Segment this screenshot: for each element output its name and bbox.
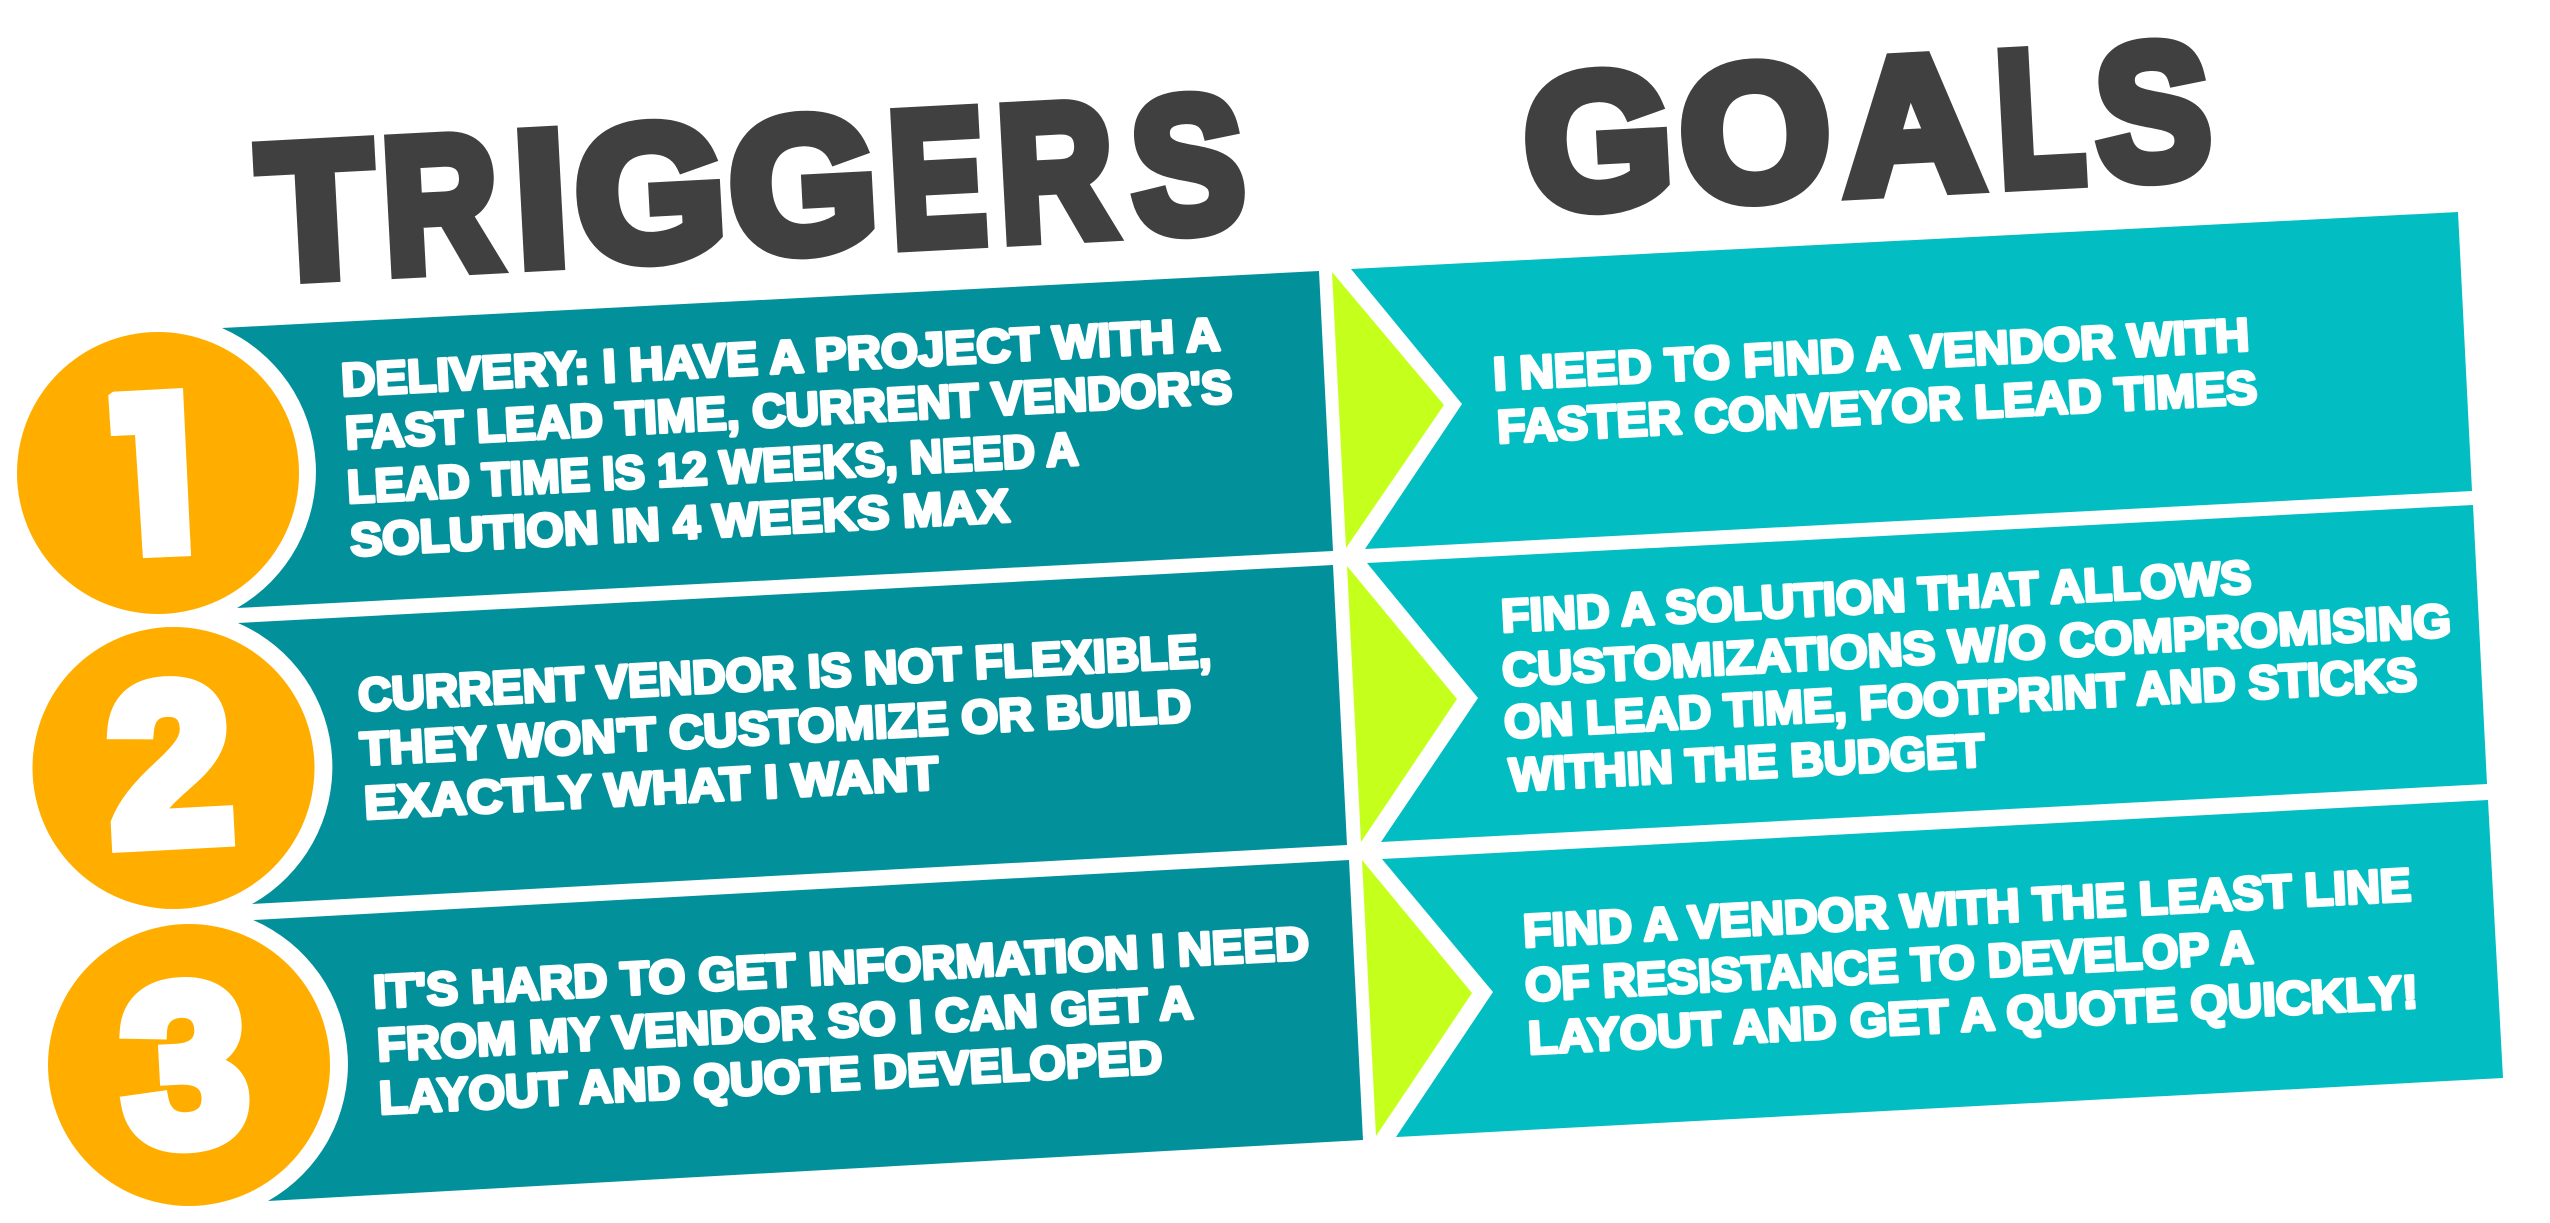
text: goal 2: WITHIN THE BUDGET: [1508, 724, 1986, 801]
title: goals: S: [2090, 3, 2215, 221]
text: goal 3: FIND A VENDOR WITH THE LEAST LINE: [1522, 859, 2412, 957]
icon: number badge 3: 3: [115, 935, 254, 1194]
title: triggers: R: [378, 96, 503, 313]
title: triggers: G: [724, 76, 883, 295]
title: triggers: E: [884, 70, 990, 287]
title: goals: O: [1675, 23, 1835, 243]
text: goal 1: [1492, 308, 2258, 453]
icon: number badge 2: [32, 627, 314, 909]
text: trigger 2: EXACTLY WHAT I WANT: [363, 747, 940, 829]
panel: goal 1: [1351, 212, 2472, 549]
title: triggers: G: [570, 84, 731, 303]
title: goals: L: [1991, 10, 2089, 226]
text: trigger 1: FAST LEAD TIME, CURRENT VENDOR'S: [344, 361, 1233, 459]
text: trigger 2: [357, 624, 1212, 829]
text: goal 2: [1500, 551, 2452, 801]
text: trigger 1: LEAD TIME IS 12 WEEKS, NEED A: [346, 423, 1080, 513]
text: goal 3: LAYOUT AND GET A QUOTE QUICKLY!: [1527, 965, 2419, 1064]
arrow: row 1: [1332, 272, 1444, 548]
text: trigger 3: LAYOUT AND QUOTE DEVELOPED: [378, 1031, 1163, 1124]
title: goals: G: [1519, 32, 1678, 251]
text: goal 3: OF RESISTANCE TO DEVELOP A: [1524, 921, 2255, 1011]
panel: trigger 3: [253, 860, 1363, 1201]
panel: trigger 1: [222, 271, 1333, 608]
icon: number badge 3: [48, 924, 330, 1206]
panel: goal 3: [1382, 800, 2503, 1137]
icon: number badge 1: 1: [75, 337, 226, 619]
icon: number badge 1: [17, 332, 299, 619]
text: trigger 3: [372, 917, 1310, 1124]
panel: trigger 2: [238, 565, 1347, 904]
text: trigger 2: THEY WON'T CUSTOMIZE OR BUILD: [359, 680, 1192, 775]
text: goal 2: FIND A SOLUTION THAT ALLOWS: [1500, 551, 2252, 642]
title: triggers: I: [510, 92, 573, 306]
panel: goal 2: [1367, 505, 2487, 842]
arrow: row 3: [1362, 860, 1472, 1136]
arrow: row 2: [1347, 566, 1457, 842]
text: goal 1: FASTER CONVEYOR LEAD TIMES: [1496, 361, 2258, 453]
text: trigger 2: CURRENT VENDOR IS NOT FLEXIBLE,: [357, 624, 1212, 721]
text: goal 3: [1522, 859, 2419, 1064]
text: goal 2: CUSTOMIZATIONS W/O COMPROMISING: [1501, 594, 2452, 696]
title: triggers: S: [1126, 57, 1249, 274]
text: trigger 1: DELIVERY: I HAVE A PROJECT WITH A: [340, 308, 1221, 406]
text: trigger 3: IT'S HARD TO GET INFORMATION I NEED: [372, 917, 1310, 1018]
text: trigger 1: SOLUTION IN 4 WEEKS MAX: [349, 480, 1011, 566]
text: trigger 1: [340, 308, 1233, 566]
text: trigger 3: FROM MY VENDOR SO I CAN GET A: [376, 976, 1194, 1071]
text: goal 2: ON LEAD TIME, FOOTPRINT AND STICKS: [1503, 648, 2418, 748]
icon: number badge 2: 2: [101, 634, 238, 893]
title: triggers: R: [993, 63, 1119, 281]
title: goals: A: [1837, 15, 1987, 234]
title: triggers: T: [255, 102, 379, 320]
text: goal 1: I NEED TO FIND A VENDOR WITH: [1492, 308, 2250, 400]
